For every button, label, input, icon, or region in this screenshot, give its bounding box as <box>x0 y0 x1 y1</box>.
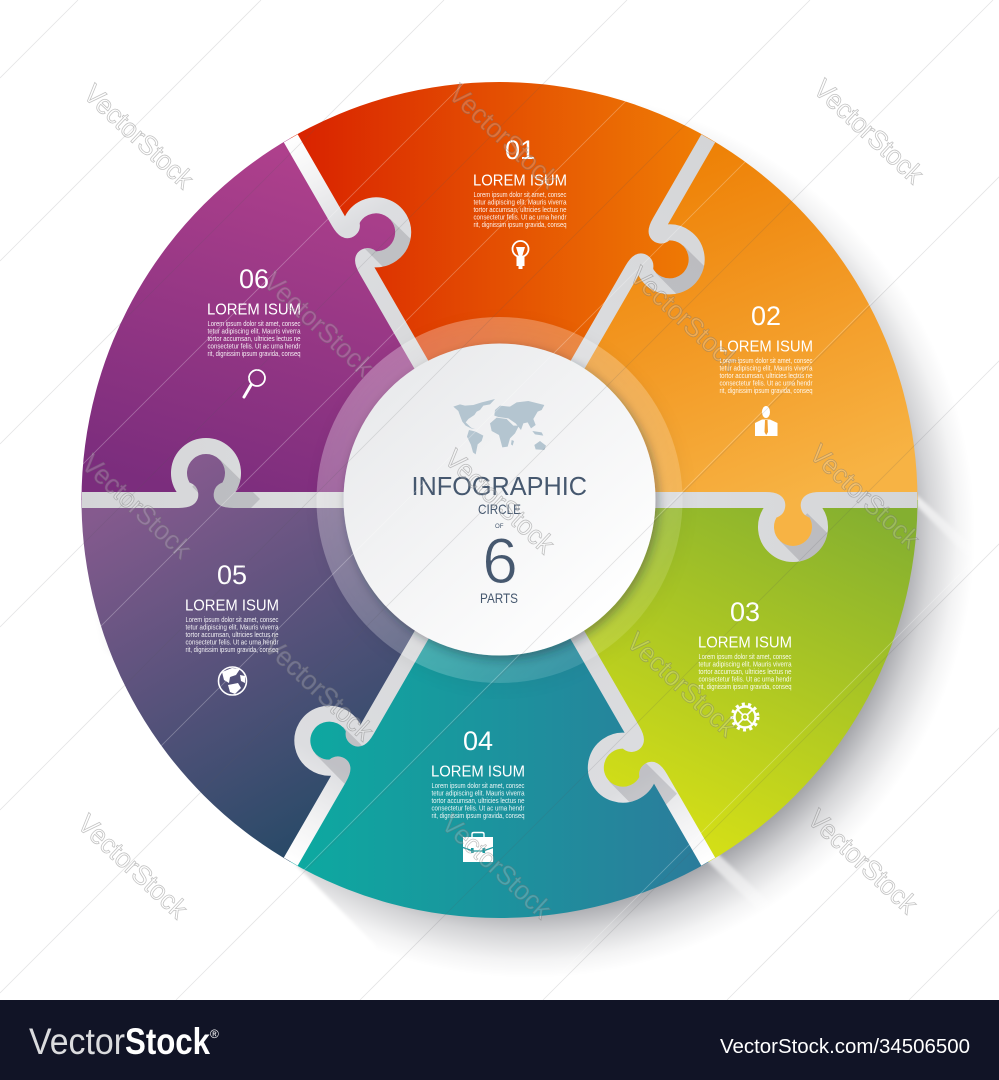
text: block 04: consectetur felis. Ut ac urna hendr <box>432 806 525 812</box>
text: block 06: rit, dignissim ipsum gravida, conseq <box>208 351 301 358</box>
text: block 01: rit, dignissim ipsum gravida, conseq <box>474 222 567 229</box>
text: block 05: consectetur felis. Ut ac urna hendr <box>186 640 279 646</box>
text: block 06: consectetur felis. Ut ac urna hendr <box>208 344 301 350</box>
footer registered mark: ® <box>210 1027 219 1041</box>
text: block 04: LOREM ISUM <box>431 764 525 780</box>
watermarks: VectorStock <box>72 808 194 925</box>
text: block 05: Lorem ipsum dolor sit amet, consec <box>186 617 279 624</box>
text: block 03: Lorem ipsum dolor sit amet, consec <box>698 654 792 661</box>
number 03: 03 <box>730 597 760 627</box>
watermarks: VectorStock <box>621 626 743 743</box>
text: block 03 <box>698 634 792 691</box>
text: block 03: consectetur felis. Ut ac urna hendr <box>698 676 792 684</box>
text: block 05: tortor accumsan, ultricies lectus ne <box>186 632 279 639</box>
text: block 04 <box>431 764 525 820</box>
watermarks: VectorStock <box>439 443 561 560</box>
big number 6: 6 <box>482 525 518 597</box>
number 06: 06 <box>239 264 269 294</box>
text: block 04: tetur adipiscing elit. Mauris viverra <box>432 790 525 798</box>
text: block 02: tetur adipiscing elit. Mauris viverra <box>720 366 813 372</box>
watermarks: VectorStock <box>76 448 198 565</box>
text: block 06 <box>207 302 301 358</box>
watermarks: VectorStock <box>808 73 930 190</box>
text: block 06: tetur adipiscing elit. Mauris viverra <box>208 328 301 336</box>
puzzle seams <box>82 111 917 889</box>
text: block 02: Lorem ipsum dolor sit amet, consec <box>720 358 813 365</box>
watermarks: VectorStock <box>78 78 200 195</box>
subtitle circle: CIRCLE <box>478 501 521 517</box>
text: block 05: rit, dignissim ipsum gravida, conseq <box>186 647 279 654</box>
text: block 02: consectetur felis. Ut ac urna hendr <box>720 380 813 388</box>
panel: 06 magenta <box>0 111 546 681</box>
panel: 05 slate purple <box>82 446 500 862</box>
panel: 02 orange <box>500 138 918 554</box>
text: block 03: LOREM ISUM <box>698 634 792 652</box>
watermarks: VectorStock <box>258 630 380 747</box>
text: block 02: rit, dignissim ipsum gravida, conseq <box>720 388 813 395</box>
subtitle parts: PARTS <box>480 590 518 606</box>
subtitle of: OF <box>495 523 504 530</box>
icon: world map <box>453 399 546 454</box>
text: block 03: tortor accumsan, ultricies lectus ne <box>698 669 792 676</box>
text: block 04: Lorem ipsum dolor sit amet, consec <box>432 783 525 790</box>
text: block 05: LOREM ISUM <box>185 598 279 614</box>
number 01: 01 <box>505 135 535 165</box>
panel: 04 teal <box>244 473 813 1043</box>
watermarks <box>72 73 930 925</box>
text: block 01: tortor accumsan, ultricies lectus ne <box>474 207 567 214</box>
text: block 03: rit, dignissim ipsum gravida, conseq <box>698 684 792 691</box>
text: block 05: tetur adipiscing elit. Mauris viverra <box>186 624 279 632</box>
footer logo: VectorStock <box>29 1021 210 1062</box>
icon: businessman <box>755 406 778 436</box>
watermarks: VectorStock <box>804 438 926 555</box>
icon: gear <box>732 704 758 730</box>
text: block 01: LOREM ISUM <box>473 172 567 190</box>
footer bar <box>0 1000 999 1080</box>
text: block 02: tortor accumsan, ultricies lectus ne <box>720 373 813 380</box>
number 02: 02 <box>751 301 781 331</box>
center circle <box>344 344 656 656</box>
text: block 06: Lorem ipsum dolor sit amet, consec <box>208 321 301 328</box>
panel: 03 green <box>453 319 999 889</box>
text: block 01: tetur adipiscing elit. Mauris viverra <box>474 200 567 206</box>
translucent ring <box>316 317 682 683</box>
text: block 01: Lorem ipsum dolor sit amet, consec <box>474 192 567 199</box>
text: block 02 <box>719 338 813 395</box>
watermarks: VectorStock <box>258 266 380 383</box>
watermarks: VectorStock <box>443 78 565 195</box>
icon: briefcase <box>463 832 493 862</box>
icon: globe <box>218 667 246 695</box>
icon: magnifier <box>244 370 265 397</box>
number 05: 05 <box>217 560 247 590</box>
text: block 03: tetur adipiscing elit. Mauris viverra <box>698 662 792 668</box>
watermarks: VectorStock <box>436 808 558 925</box>
text: block 01: consectetur felis. Ut ac urna hendr <box>474 214 567 222</box>
text: block 02: LOREM ISUM <box>719 338 813 356</box>
icon: light bulb <box>512 241 528 269</box>
text: block 06: tortor accumsan, ultricies lectus ne <box>208 336 301 343</box>
watermarks: VectorStock <box>624 260 746 377</box>
text: block 05 <box>185 598 279 654</box>
footer url: VectorStock.com/34506500 <box>720 1036 970 1058</box>
text: block 04: rit, dignissim ipsum gravida, conseq <box>432 813 525 820</box>
text: block 01 <box>473 172 567 229</box>
title: INFOGRAPHIC <box>412 471 587 501</box>
text: block 04: tortor accumsan, ultricies lectus ne <box>432 798 525 805</box>
panel: 01 red orange <box>186 0 755 527</box>
watermarks: VectorStock <box>802 803 924 920</box>
number 04: 04 <box>463 726 493 756</box>
text: block 06: LOREM ISUM <box>207 302 301 318</box>
knob shadows on seams <box>192 218 847 822</box>
